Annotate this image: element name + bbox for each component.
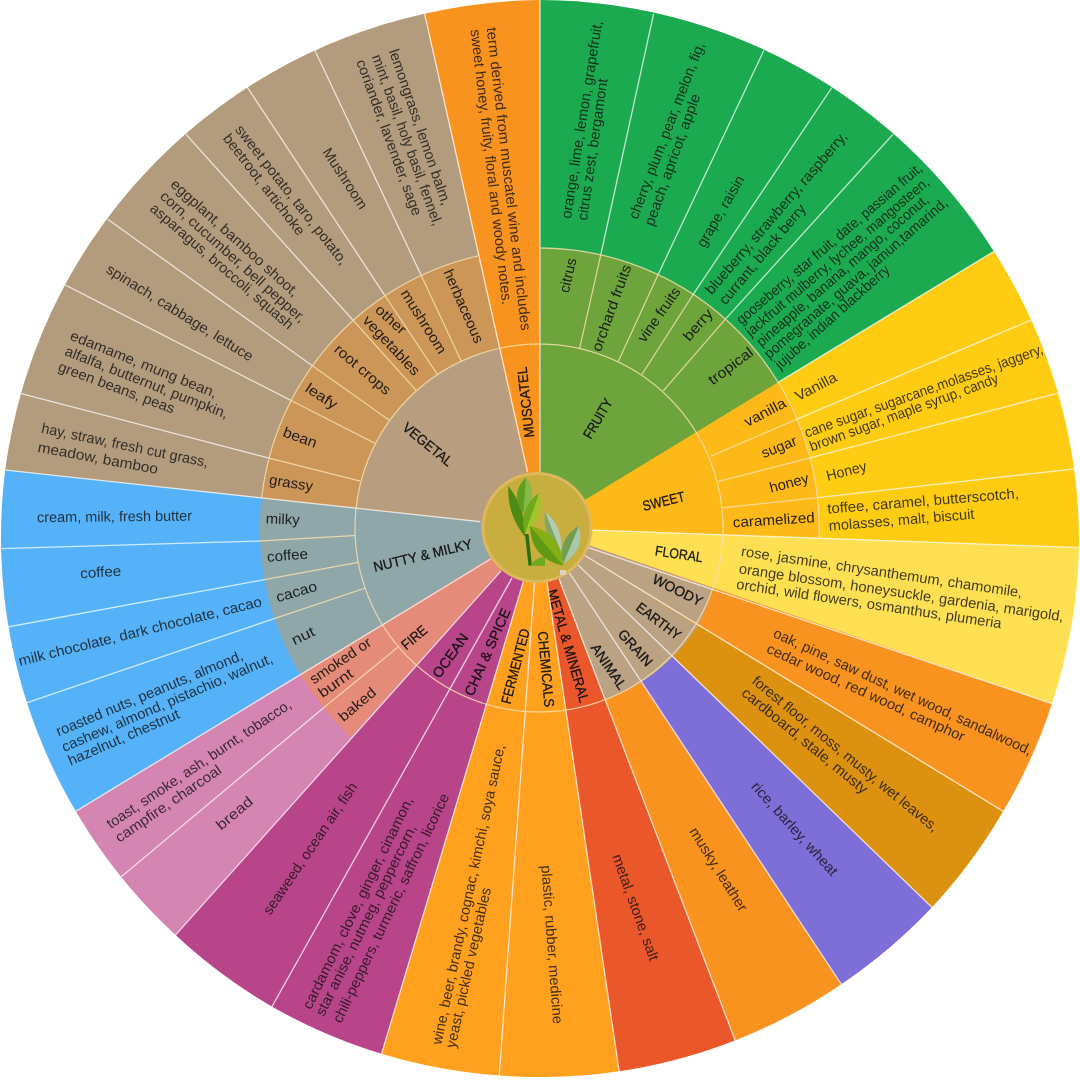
label: caramelized: caramelized — [732, 510, 815, 531]
notes: other vegetables: sweet potato, taro, potato, — [231, 122, 351, 268]
notes: tropical: pineapple, banana, mango, coconut, — [754, 192, 932, 350]
notes: woody: oak, pine, saw dust, wet wood, sandalwood, — [771, 626, 1034, 759]
notes: tropical: jujube, indian blackberry — [771, 262, 894, 373]
panel: earthy — [539, 528, 1003, 907]
notes: earthy: forest floor, moss, musty, wet leaves, — [749, 673, 941, 835]
panel: fermented — [382, 528, 539, 1076]
heading: metal and mineral: METAL & MINERAL — [544, 587, 593, 704]
notes: grain: rice, barley, wheat — [748, 779, 840, 880]
chai wedge — [272, 528, 539, 1054]
notes: smoked or burnt: toast, smoke, ash, burnt, tobacco, — [104, 697, 295, 832]
notes: bean: green beans, peas — [56, 359, 177, 417]
label: herbaceous: herbaceous — [440, 267, 486, 346]
centre badge: tea leaves — [483, 474, 591, 582]
heading: chemicals: CHEMICALS — [535, 631, 558, 708]
sweet inner wedge — [539, 382, 819, 538]
notes: metal: metal, stone, salt — [608, 852, 661, 963]
fermented wedge — [382, 528, 539, 1076]
notes: fermented: yeast, pickled vegetables — [443, 886, 495, 1050]
notes: chai and spice: chili-peppers, turmeric, saffron, licorice — [330, 791, 453, 1026]
fire inner wedge — [300, 528, 539, 737]
notes: animal: musky, leather — [686, 825, 750, 915]
woody outer wedge — [539, 528, 1052, 811]
notes: grassy: meadow, bamboo — [36, 440, 159, 478]
heading: muscatel: MUSCATEL — [514, 366, 537, 438]
notes: grassy: hay, straw, fresh cut grass, — [40, 421, 210, 471]
heading: floral: FLORAL — [654, 542, 704, 565]
label: other vegetables: other — [372, 302, 409, 338]
nutty outer wedge — [1, 470, 539, 811]
notes: woody: cedar wood, red wood, camphor — [764, 641, 967, 745]
animal inner wedge — [539, 528, 642, 700]
muscatel wedge — [425, 0, 540, 528]
label: vanilla: vanilla — [742, 395, 790, 431]
notes: bean: edamame, mung bean, — [68, 328, 219, 402]
panel: floral — [539, 528, 1079, 704]
notes: tropical: jackfruit mulberry, lychee, mangosteen, — [742, 175, 933, 341]
heading: vegetal: VEGETAL — [400, 419, 456, 469]
heading: grain: GRAIN — [615, 626, 656, 669]
heading: fruity: FRUITY — [580, 395, 616, 441]
notes: floral: orange blossom, honeysuckle, gardenia, marigold, — [738, 561, 1065, 625]
label: bean: bean — [281, 425, 319, 452]
grain outer wedge — [539, 528, 932, 984]
panel: ocean — [176, 528, 539, 1007]
fruity inner wedge — [539, 248, 778, 528]
heading: animal: ANIMAL — [588, 640, 630, 693]
notes: herbaceous: mint, basil, holy basil, fennel, — [368, 53, 445, 228]
panel: nutty and milky — [1, 470, 539, 811]
panel: fire — [76, 528, 539, 935]
notes: leafy: spinach, cabbage, lettuce — [103, 262, 256, 365]
notes: root crops: corn, cucumber, bell pepper, — [157, 189, 308, 326]
centre disc — [483, 474, 591, 582]
ocean wedge — [176, 528, 539, 1007]
label: leafy: leafy — [302, 381, 341, 414]
notes: caramelized: toffee, caramel, butterscotch, — [827, 486, 1019, 518]
label: honey: honey — [768, 471, 811, 497]
earthy outer wedge — [539, 528, 1003, 907]
panel: grain — [539, 528, 932, 984]
notes: baked: bread — [213, 794, 257, 834]
label: sugar: sugar — [759, 433, 800, 462]
notes: sugar: cane sugar, sugarcane,molasses, jaggery, — [803, 342, 1045, 442]
label: smoked or burnt: smoked or — [307, 635, 375, 688]
label: baked: baked — [336, 685, 380, 725]
notes: tropical: pomegranate, guava, jamun,tamarind, — [761, 195, 951, 362]
vegetal inner wedge — [356, 348, 539, 528]
notes: berry: currant, black berry — [716, 201, 810, 308]
notes: caramelized — [827, 486, 1019, 535]
notes: citrus: citrus zest, bergamont — [575, 78, 612, 221]
label: other vegetables: vegetables — [359, 313, 423, 379]
notes: sugar: brown sugar, maple syrup, candy — [808, 371, 1001, 455]
notes: smoked or burnt: campfire, charcoal — [113, 762, 225, 846]
notes: honey: Honey — [825, 459, 869, 485]
icon: tea sprig — [508, 477, 580, 566]
earthy inner wedge — [539, 528, 698, 657]
notes: orchard fruits: peach, apricot, apple — [642, 92, 704, 228]
notes: coffee: coffee — [80, 564, 122, 582]
label: grassy: grassy — [268, 472, 315, 495]
panel: chemicals — [499, 528, 619, 1077]
heading: earthy: EARTHY — [633, 599, 685, 643]
notes: floral: rose, jasmine, chrysanthemum, chamomile, — [740, 544, 1023, 601]
label: citrus: citrus — [557, 257, 581, 294]
notes: nut: roasted nuts, peanuts, almond, — [54, 648, 246, 740]
panel: animal — [539, 528, 841, 1040]
label: milky: milky — [265, 511, 301, 529]
heading: fire: FIRE — [398, 622, 430, 653]
notes: muscatel: term derived from muscatel wine and includes — [483, 27, 533, 331]
nutty inner wedge — [260, 498, 539, 674]
label: root crops: root crops — [331, 342, 394, 399]
metal wedge — [539, 528, 735, 1071]
notes: vine fruits: grape, raisin — [694, 173, 748, 250]
panel: metal and mineral — [539, 528, 735, 1071]
notes: root crops: asparagus, broccoli, squash — [146, 201, 296, 333]
floral wedge — [539, 528, 1079, 704]
label: cacao: cacao — [274, 579, 319, 606]
label: nut: nut — [289, 624, 318, 649]
notes: vanilla: Vanilla — [793, 369, 841, 405]
notes: milky: cream, milk, fresh butter — [37, 509, 192, 526]
notes: herbaceous: lemongrass, lemon balm, — [385, 47, 454, 208]
notes: fermented: wine, beer, brandy, cognac, kimchi, soya sauce, — [429, 743, 509, 1047]
fire outer wedge — [76, 528, 539, 935]
panel: chai and spice — [272, 528, 539, 1054]
notes: nut: cashew, almond, pistachio, walnut, — [59, 651, 275, 756]
notes: mushroom: Mushroom — [319, 145, 370, 213]
chemicals wedge — [499, 528, 619, 1077]
heading: sweet: SWEET — [641, 488, 687, 514]
panel: sweet — [539, 251, 1079, 548]
animal outer wedge — [539, 528, 841, 1040]
vegetal outer wedge — [5, 14, 539, 528]
notes: chai and spice: star anise, nutmeg, peppercorn, — [313, 822, 420, 1019]
tiny mark — [560, 570, 566, 575]
heading: nutty and milky: NUTTY & MILKY — [372, 535, 474, 575]
label: coffee: coffee — [266, 547, 309, 566]
label: berry: berry — [680, 306, 717, 345]
heading: fermented: FERMENTED — [498, 627, 533, 705]
woody inner wedge — [539, 528, 713, 626]
panel: muscatel — [425, 0, 540, 528]
panel: fruity — [539, 0, 994, 528]
notes: orchard fruits: cherry, plum, pear, melon, fig, — [626, 40, 709, 221]
notes: chai and spice: cardamom, clove, ginger, cinamon, — [300, 795, 417, 1012]
label: orchard fruits: orchard fruits — [589, 263, 635, 354]
notes: berry: blueberry, strawberry, raspberry, — [702, 129, 851, 298]
label: smoked or burnt: burnt — [316, 666, 357, 702]
panel: woody — [539, 528, 1052, 811]
label: vine fruits: vine fruits — [635, 285, 684, 345]
notes: nut: hazelnut, chestnut — [66, 707, 182, 769]
vegetal middle wedge — [262, 256, 539, 528]
notes: other vegetables: beetroot, artichoke — [219, 131, 308, 239]
panel: vegetal — [5, 14, 539, 528]
label: tropical: tropical — [706, 345, 757, 389]
fruity outer wedge — [539, 0, 994, 528]
notes: chemicals: plastic, rubber, medicine — [537, 865, 565, 1024]
label: mushroom: mushroom — [397, 287, 449, 357]
grain inner wedge — [539, 528, 673, 682]
notes: herbaceous: coriander, lavender, sage — [352, 58, 424, 218]
notes: bean: alfalfa, butternut, pumpkin, — [62, 344, 230, 422]
notes: floral: orchid, wild flowers, osmanthus, plumeria — [735, 577, 1004, 632]
sweet outer wedge — [539, 251, 1079, 548]
notes: root crops: eggplant, bamboo shoot, — [167, 177, 302, 300]
notes: cacao: milk chocolate, dark chocolate, cacao — [17, 594, 264, 670]
heading: woody: WOODY — [650, 571, 706, 610]
notes: citrus: orange, lime, lemon, grapefruit, — [559, 20, 606, 220]
heading: ocean: OCEAN — [429, 630, 471, 681]
notes: muscatel: sweet honey, fruity, floral and woody notes. — [467, 28, 514, 306]
notes: tropical: gooseberry, star fruit, date, passian fruit, — [734, 161, 926, 328]
notes: earthy: cardboard, stale, musty — [738, 685, 871, 798]
heading: chai and spice: CHAI & SPICE — [461, 606, 514, 698]
notes: caramelized: molasses, malt, biscuit — [828, 507, 975, 535]
notes: ocean: seaweed, ocean air, fish — [260, 780, 361, 918]
